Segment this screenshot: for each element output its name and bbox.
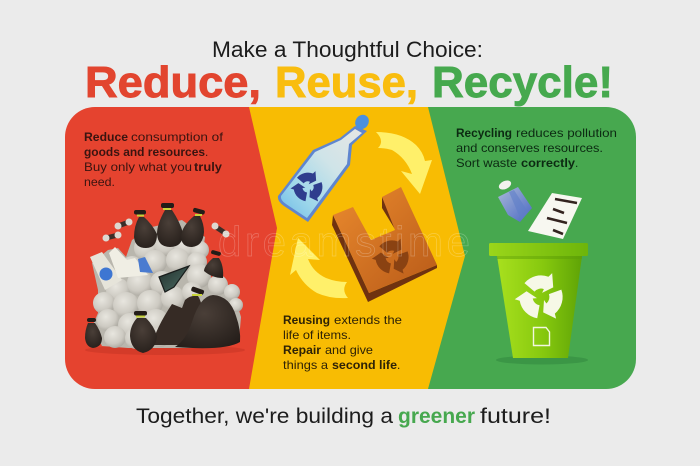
top bag 3 [181, 208, 205, 247]
panel text: recycle: correctly [521, 156, 575, 170]
panel text: recycle: Recycling [456, 126, 512, 140]
panel text: reuse: and give [325, 343, 373, 357]
front bag [130, 311, 157, 353]
panel: recycle [420, 107, 636, 389]
white cartons [90, 252, 122, 290]
illustration: paper [528, 193, 582, 239]
title: Reduce, Reuse, Recycle: Reuse, [275, 58, 418, 107]
illustration: bottle [278, 112, 372, 222]
panel text: recycle [456, 126, 617, 170]
title: subtitle: Make a Thoughtful Choice: [212, 37, 483, 62]
panel group [65, 107, 636, 389]
title: Reduce, Reuse, Recycle: Reduce, [85, 58, 261, 107]
floor shadow [85, 345, 245, 355]
illustration: carton [497, 179, 532, 222]
panel text: reduce: consumption of [131, 130, 224, 144]
bag front [333, 187, 437, 293]
panel text: reuse: second life [332, 358, 397, 372]
panel text: recycle: . [575, 156, 578, 170]
panel text: recycle: reduces pollution [516, 126, 617, 140]
panel text: reuse: Reusing [283, 313, 330, 327]
arrow: top right [376, 132, 432, 194]
top bag 1 [134, 210, 157, 248]
illustration: garbage pile [85, 203, 245, 355]
blue lid [100, 268, 112, 280]
bag sides [332, 215, 437, 302]
panel text: reduce: Buy only what you [84, 160, 192, 174]
footer tagline: Together, we're building a [136, 404, 393, 428]
panel text: reduce: Reduce [84, 130, 128, 144]
big bags [152, 296, 208, 345]
flying bones [102, 218, 230, 242]
blue carton [138, 257, 153, 273]
panel: reduce [65, 107, 295, 389]
recycle mark on bottle [290, 171, 327, 205]
dark screen [159, 266, 189, 292]
pile puffs [93, 232, 243, 349]
top bag 2 [157, 203, 183, 247]
panel text: reduce: need. [84, 175, 115, 189]
panel text: reuse: life of items. [283, 328, 351, 342]
illustration: orange bag [332, 187, 437, 302]
footer tagline: greener [398, 404, 476, 428]
illustration: recycling bin [489, 243, 588, 364]
panel text: recycle: and conserves resources. [456, 141, 603, 155]
panel text: reuse: extends the [334, 313, 402, 327]
title: Reduce, Reuse, Recycle [85, 58, 613, 107]
document mark on bin [534, 328, 550, 346]
panel: reuse [249, 107, 465, 389]
panel text: reuse: . [397, 358, 400, 372]
watermark: dreamstime [218, 218, 470, 265]
footer tagline: future! [480, 404, 551, 428]
title: Reduce, Reuse, Recycle: Recycle! [432, 58, 613, 107]
panel text: reduce: truly [194, 160, 222, 174]
panel text: reduce [84, 130, 224, 189]
pile base [92, 220, 241, 348]
arrow: bottom left [290, 238, 348, 298]
panel text: recycle: Sort waste [456, 156, 517, 170]
panel text: reuse [283, 313, 402, 372]
recycle mark on bin [514, 273, 570, 323]
footer tagline [136, 404, 551, 428]
recycle mark on bag [371, 239, 414, 277]
panel text: reduce: . [205, 145, 208, 159]
left bag [85, 318, 102, 348]
right bag [204, 250, 223, 278]
panel text: reuse: Repair [283, 343, 321, 357]
panel text: reuse: things a [283, 358, 328, 372]
panel text: reduce: goods and resources [84, 145, 205, 159]
